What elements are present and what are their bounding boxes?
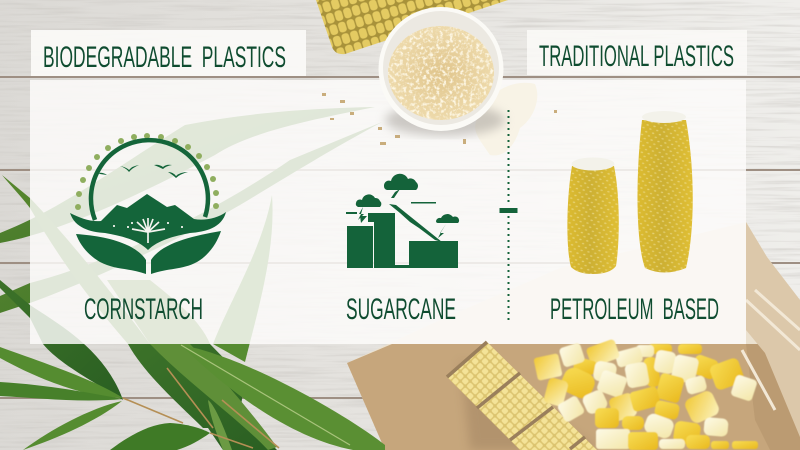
corn roll on paper xyxy=(447,342,597,450)
panel: left heading xyxy=(31,30,306,76)
leaf: second blade xyxy=(0,122,382,313)
leaf: bottom small xyxy=(110,423,210,450)
panel: right heading xyxy=(527,30,747,75)
starch spill and crumbs xyxy=(322,83,557,155)
bowl of starch xyxy=(378,7,505,136)
leaf: big lower blade xyxy=(181,345,385,450)
leaf: small lower blade xyxy=(208,400,232,450)
translucent main panel xyxy=(30,80,746,344)
label: cornstarch: CORNSTARCH xyxy=(84,293,203,326)
logo: left lower leaf xyxy=(76,234,146,274)
leaves xyxy=(0,107,385,450)
item: small yellow cylinder xyxy=(567,158,619,274)
icon: bars xyxy=(347,213,458,268)
item: sugarcane xyxy=(346,174,459,268)
corn kernels pile xyxy=(533,338,758,450)
leaf: upright blade xyxy=(213,195,273,362)
logo: birds xyxy=(98,165,188,178)
leaf: diagonal blade xyxy=(2,175,150,344)
leaf: left fan lower xyxy=(0,382,123,401)
logo: central plant xyxy=(113,218,183,243)
item: cornstarch xyxy=(70,133,226,274)
leaf midrib: big lower blade xyxy=(181,345,350,445)
leaf: centre light blade xyxy=(150,344,277,450)
logo: dots ring xyxy=(75,133,219,210)
logo: right lower leaf xyxy=(151,231,221,274)
top corn cob xyxy=(316,0,508,54)
leaf: left fan upper xyxy=(0,280,123,400)
leaf: centre cluster xyxy=(128,344,277,450)
starch fill xyxy=(388,26,494,120)
heading: biodegradable plastics: BIODEGRADABLE PLASTICS xyxy=(43,41,286,74)
logo: sun ring xyxy=(91,140,208,220)
item: tall yellow cylinder xyxy=(637,111,693,272)
icon: clouds xyxy=(356,174,459,223)
label: sugarcane: SUGARCANE xyxy=(346,293,456,326)
logo: mountains and upper leaf xyxy=(70,194,226,250)
leaf stems xyxy=(123,368,279,448)
leaf: thin blade xyxy=(23,401,122,450)
kraft paper sheet xyxy=(347,222,800,450)
leaf: inner diagonal blade xyxy=(107,280,210,344)
divider: dotted line with dash xyxy=(500,110,518,320)
icon: lightning xyxy=(346,189,446,242)
leaf: long upper blade xyxy=(0,107,375,243)
leaf: left fan middle xyxy=(0,347,123,398)
